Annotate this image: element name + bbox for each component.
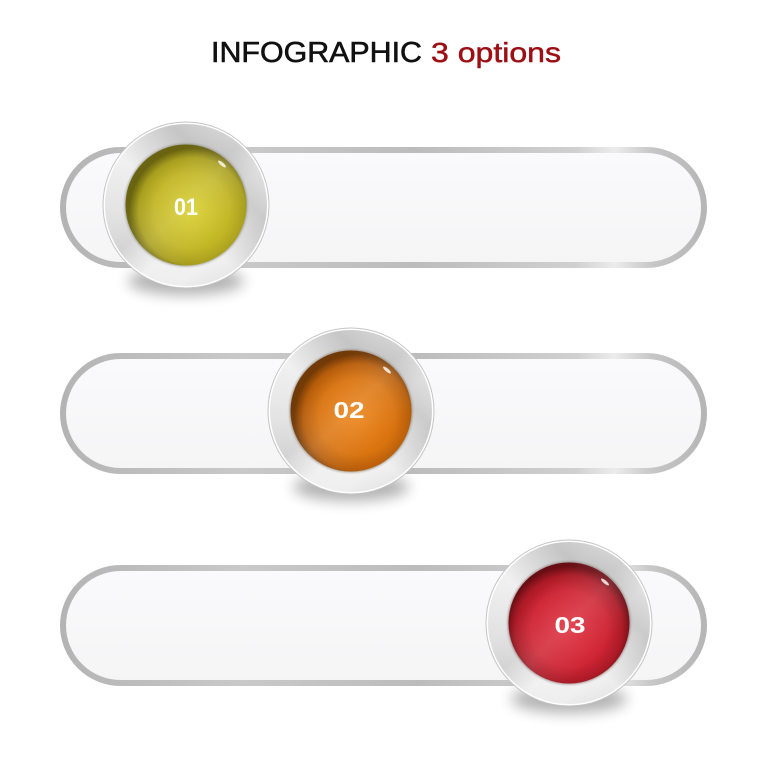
red sphere: [508, 562, 630, 684]
badge shadow: [511, 685, 627, 713]
panel: option 2 bar: [63, 356, 704, 471]
option 2 badge: [268, 328, 434, 501]
title: [211, 37, 561, 69]
title: 3 options: [431, 37, 561, 68]
orange sphere: [290, 350, 412, 472]
option 3 badge: [486, 540, 652, 713]
number 03: 03: [554, 612, 586, 638]
badge shadow: [128, 267, 244, 295]
metal ring: [268, 328, 434, 494]
option 1 badge: [103, 122, 269, 295]
metal ring: [103, 122, 269, 288]
number 01: 01: [174, 194, 198, 221]
number 02: 02: [334, 397, 365, 423]
title: INFOGRAPHIC: [211, 37, 422, 69]
metal ring: [486, 540, 652, 706]
panel: option 3 bar: [63, 568, 704, 683]
yellow sphere: [124, 144, 248, 266]
panel: option 1 bar: [63, 150, 704, 265]
badge shadow: [293, 473, 409, 501]
